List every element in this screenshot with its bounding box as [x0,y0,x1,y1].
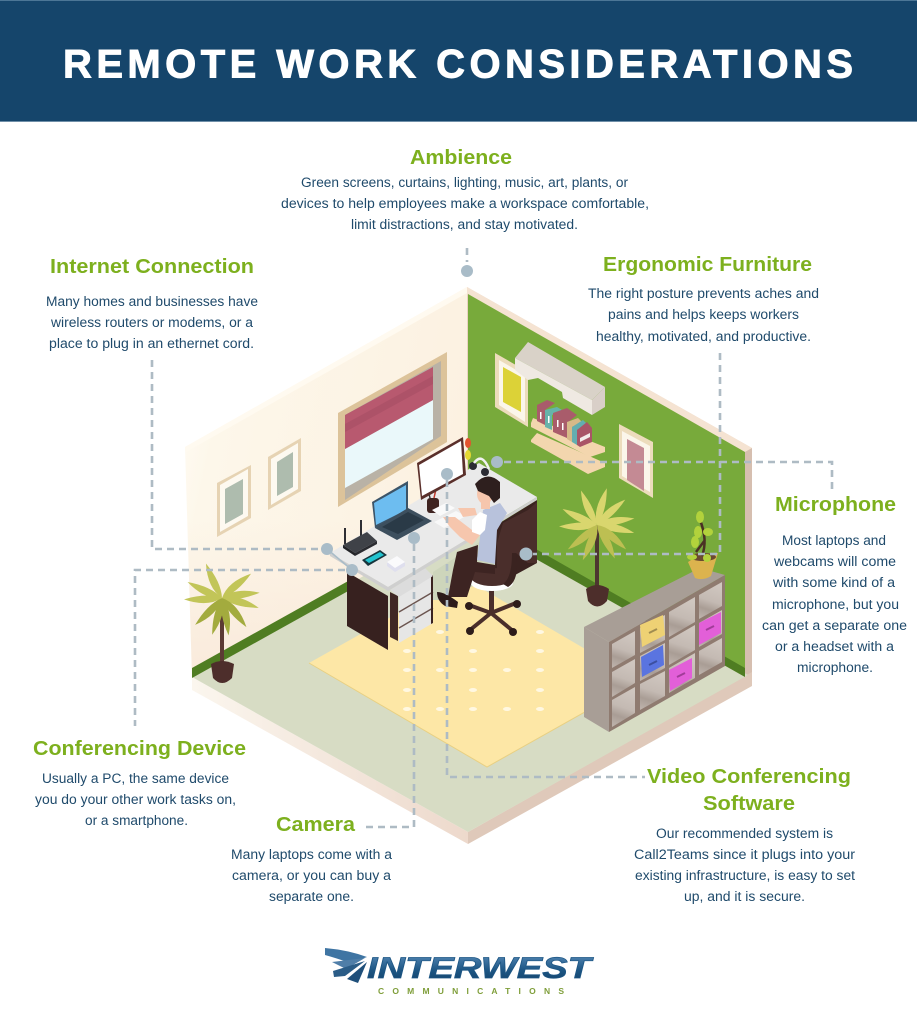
wall mounted air conditioner [515,342,605,415]
under-desk floor shadow [433,532,495,600]
callout: Camera: separate one. [269,889,354,904]
wall frame 2 [268,438,301,510]
left wall [185,287,467,677]
callout: Conferencing Device: Conferencing Device [33,737,246,760]
callout: Internet Connection: wireless routers or modems, or a [50,315,254,330]
callout: Ambience: Green screens, curtains, lighting, music, art, plants, or [301,175,629,190]
callout: Ergonomic Furniture: healthy, motivated, and productive. [596,329,811,344]
picture frame pink [619,424,653,498]
leader lines and callout dots [135,248,832,827]
logo: Interwest Communications: COMMUNICATIONS [378,986,564,996]
callout: Conferencing Device: you do your other work tasks on, [35,792,236,807]
callout: Internet Connection: place to plug in an ethernet cord. [49,336,254,351]
floor [192,515,752,844]
vest [477,503,507,564]
right green wall [467,287,752,680]
callout: Ergonomic Furniture: Ergonomic Furniture [603,253,812,276]
wall potted plant [559,487,635,606]
desk top [330,463,537,587]
callout: Microphone: with some kind of a [772,575,896,590]
callout: Ergonomic Furniture: The right posture prevents aches and [588,286,819,301]
rug [309,577,640,767]
chair base [465,587,521,636]
callout: Microphone: can get a separate one [762,618,907,633]
keyboard and notes [432,503,466,528]
callout: Microphone: microphone, but you [772,597,899,612]
callout: Internet Connection: Internet Connection [50,255,254,278]
pen cup [427,489,439,513]
left potted plant [184,562,260,683]
callout: Conferencing Device: Usually a PC, the same device [42,771,229,786]
desk drawers [390,568,433,643]
flower and microphone headset [465,438,489,476]
storage bins [640,612,721,691]
head [477,484,493,504]
isometric room illustration [184,287,752,844]
desk [330,463,537,650]
header banner [0,0,917,122]
callout: Microphone: Microphone [775,493,896,516]
callout: Ambience: Ambience [410,146,512,169]
office chair [465,568,521,636]
desk end panel [495,500,537,586]
cube storage shelf [584,568,725,732]
callout: Ergonomic Furniture: pains and helps keeps workers [608,307,799,322]
router [343,520,377,556]
legs [448,545,495,597]
callout: Video Conferencing Software: up, and it is secure. [684,889,805,904]
wall frame 1 [217,465,251,537]
callout: Video Conferencing Software: existing infrastructure, is easy to set [635,868,855,883]
callout: Conferencing Device [33,737,246,828]
callout: Ambience: limit distractions, and stay motivated. [351,217,578,232]
callout: Video Conferencing Software: Call2Teams since it plugs into your [634,847,856,862]
paper stack [387,556,405,572]
callout: Ambience [281,146,649,232]
small pot plant [687,511,718,579]
skirting boards [192,540,745,678]
smartphone [362,550,387,566]
callout: Video Conferencing Software: Our recommended system is [656,826,833,841]
callout: Internet Connection [46,255,258,351]
callout: Camera [231,813,393,904]
laptop [372,481,432,540]
callout: Video Conferencing Software [634,765,856,904]
logo wing icon [325,948,367,983]
shoe [437,592,458,608]
shelf cells [612,582,722,727]
chair seat [471,575,513,591]
callout: Microphone: Most laptops and [782,533,886,548]
logo: Interwest Communications: INTERWEST [367,952,594,985]
callout: Camera: camera, or you can buy a [232,868,391,883]
callout: Microphone [762,493,907,675]
shelves with books [531,400,605,474]
monitor [417,437,466,500]
chair back [497,502,537,587]
callout: Camera: Many laptops come with a [231,847,393,862]
window [338,352,447,507]
arms [458,508,477,517]
picture frame yellow [495,353,528,427]
callout: Video Conferencing Software: Video Conferencing [647,765,851,788]
callout: Camera: Camera [276,813,356,836]
title: REMOTE WORK CONSIDERATIONS [63,42,853,86]
callout: Microphone: webcams will come [773,554,896,569]
callout: Video Conferencing Software: Software [703,792,795,815]
callout: Ambience: devices to help employees make a workspace comfortable, [281,196,649,211]
callout: Microphone: microphone. [797,660,873,675]
logo: Interwest Communications [325,948,594,996]
person [437,476,507,608]
callout: Internet Connection: Many homes and businesses have [46,294,258,309]
callout: Conferencing Device: or a smartphone. [85,813,188,828]
callout: Ergonomic Furniture [588,253,819,344]
desk left leg [347,572,388,650]
callout: Microphone: or a headset with a [775,639,895,654]
